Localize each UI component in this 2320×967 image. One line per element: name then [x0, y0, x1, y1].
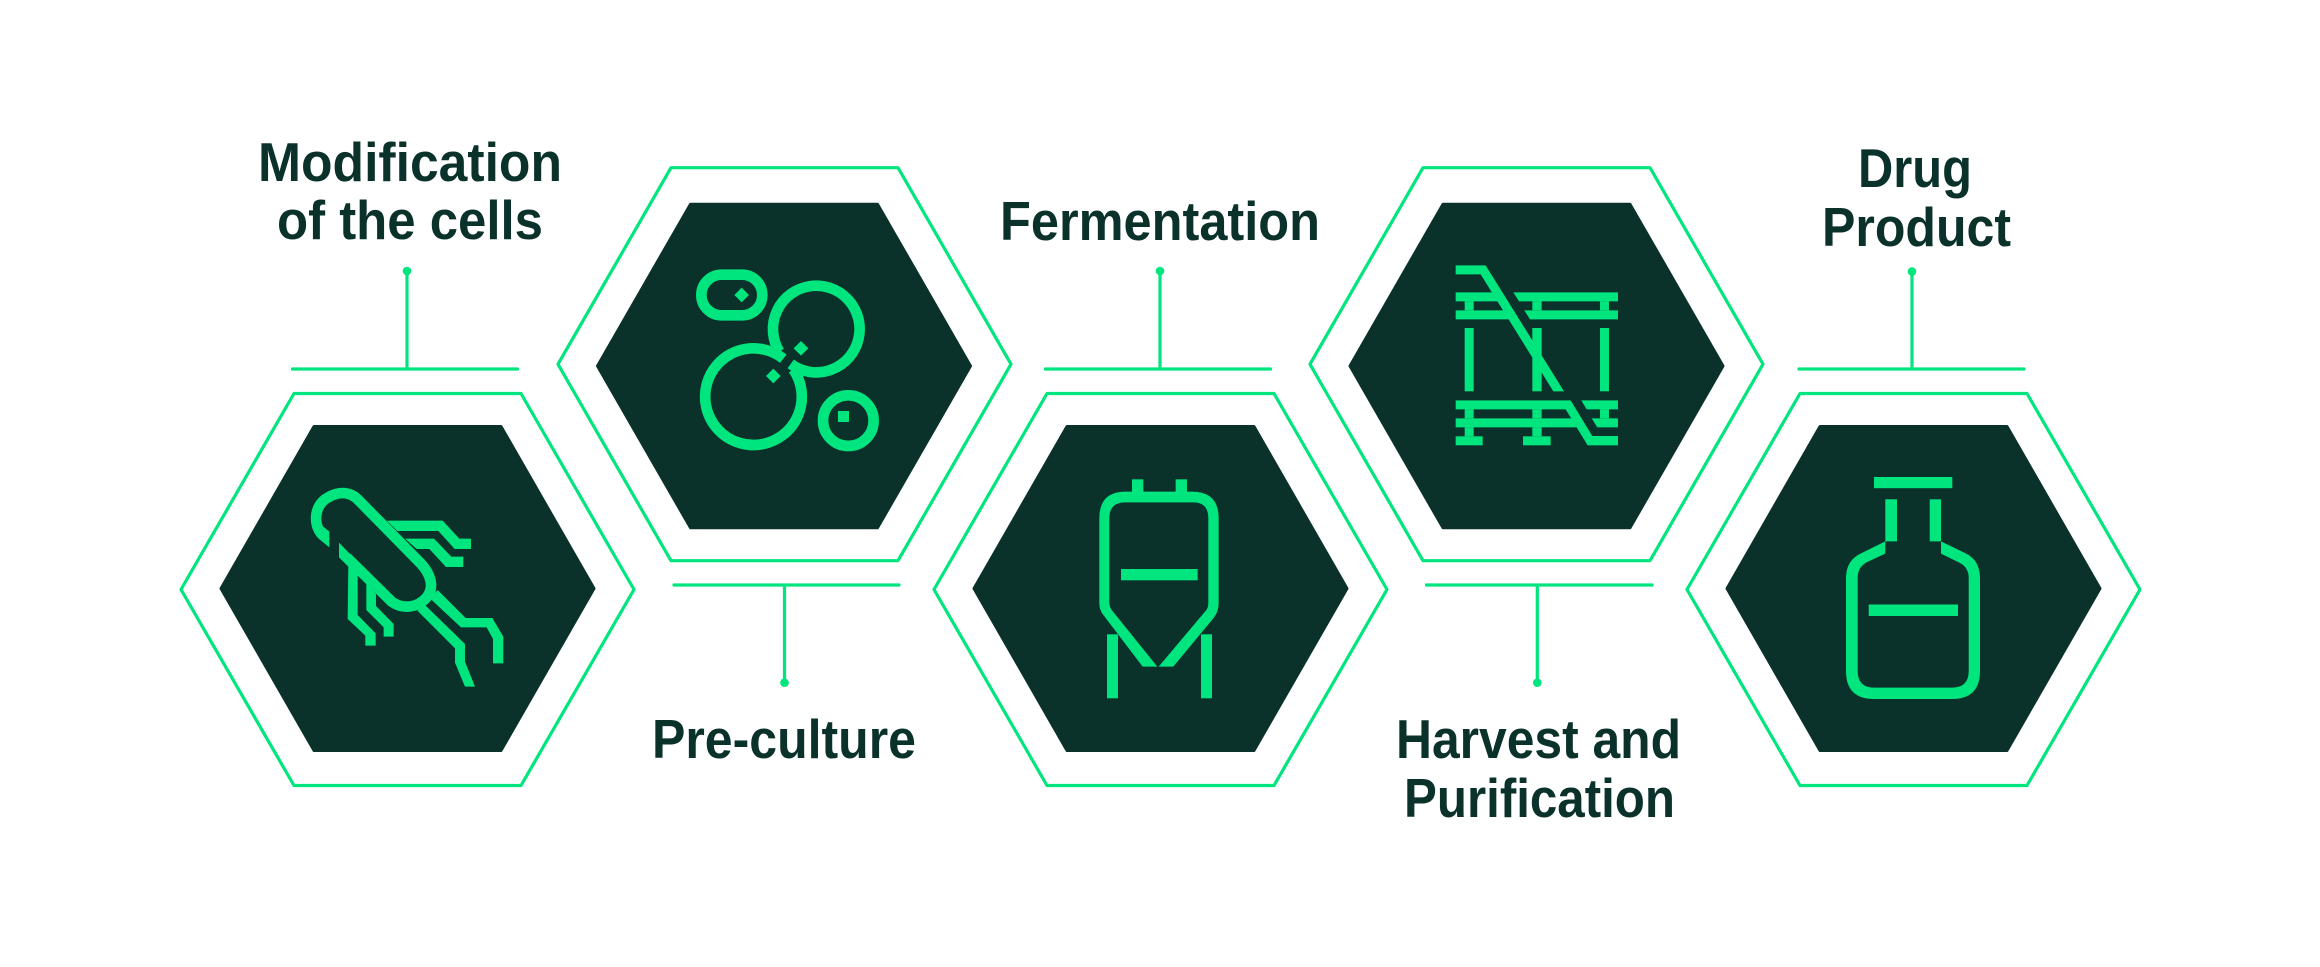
hexagon outline: step 5	[1687, 394, 2140, 786]
label: Drug Product: Product	[1822, 196, 2011, 258]
hexagon fill: step 2	[598, 204, 970, 528]
icon: cells	[701, 275, 874, 446]
step 4: harvest and purification	[1310, 168, 1763, 829]
label: Harvest and Purification: Purification	[1404, 767, 1675, 829]
connector: step 3	[1046, 267, 1270, 369]
hexagon fill: step 3	[974, 426, 1347, 750]
connector: step 5	[1799, 267, 2024, 369]
step 3: fermentation	[934, 190, 1387, 786]
connector: step 4	[1426, 585, 1652, 687]
label: Drug Product	[1822, 137, 2011, 258]
label: Fermentation: Fermentation	[1000, 190, 1320, 252]
hexagon fill: step 1	[221, 426, 594, 750]
icon: fermenter tank	[1099, 479, 1219, 698]
connector: step 1	[292, 267, 518, 369]
hexagon outline: step 1	[181, 394, 634, 786]
label: Modification of the cells: of the cells	[277, 189, 543, 251]
label: Harvest and Purification: Harvest and	[1396, 708, 1681, 770]
label: Drug Product: Drug	[1858, 137, 1972, 199]
hexagon outline: step 3	[934, 394, 1387, 786]
icon: filtration column	[1456, 265, 1618, 445]
icon: drug bottle	[1846, 477, 1980, 699]
connector: step 2	[674, 585, 899, 687]
hexagon fill: step 4	[1350, 204, 1723, 528]
label: Modification of the cells	[258, 131, 562, 251]
label: Harvest and Purification	[1396, 708, 1681, 829]
step 2: pre-culture	[558, 168, 1011, 770]
hexagon outline: step 4	[1310, 168, 1763, 561]
icon: bacterium	[316, 493, 503, 687]
step 5: drug product	[1687, 137, 2140, 786]
label: Pre-culture: Pre-culture	[652, 708, 916, 770]
hexagon outline: step 2	[558, 168, 1011, 561]
hexagon fill: step 5	[1727, 426, 2100, 750]
step 1: modification of the cells	[181, 131, 634, 786]
label: Modification of the cells: Modification	[258, 131, 562, 193]
